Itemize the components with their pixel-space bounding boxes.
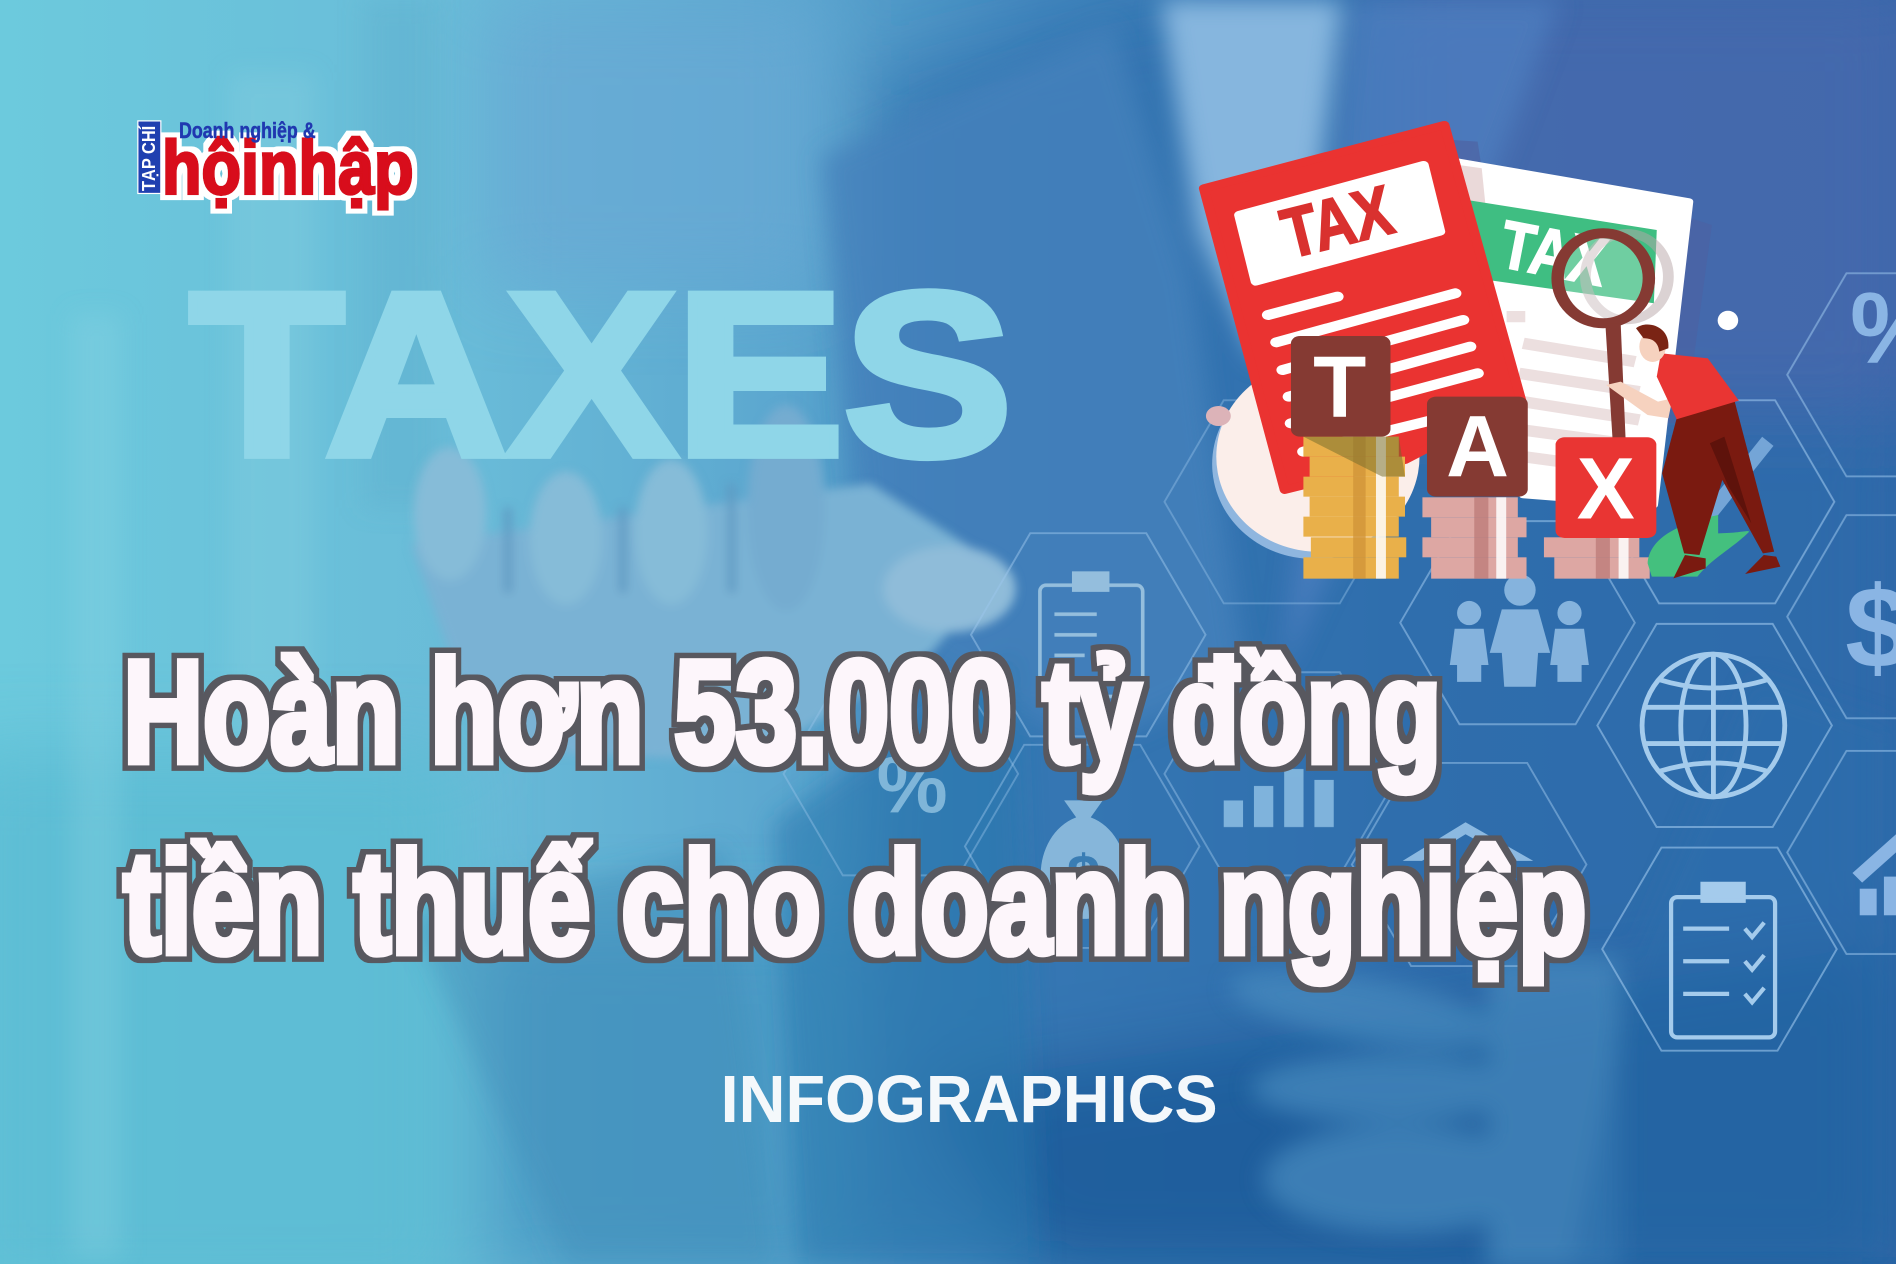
white tax document [1453, 140, 1712, 505]
gold coin stack [1303, 437, 1406, 579]
letter X on block: X [1577, 441, 1635, 538]
INFOGRAPHICS label: INFOGRAPHICS [721, 1063, 1218, 1137]
second hand, lower right [1224, 677, 1896, 1264]
icon: clipboard left [1040, 573, 1143, 696]
pink coin stack under X [1544, 537, 1650, 579]
hand with pointing finger [411, 405, 1016, 762]
icon: group of people [1450, 574, 1589, 687]
letter A on block: A [1446, 398, 1509, 495]
man leaning on magnifier [1606, 325, 1780, 578]
icon: dollar bag: $ [1067, 842, 1100, 910]
headline [123, 631, 1586, 984]
icon: clipboard right [1671, 884, 1775, 1037]
red tax document [1204, 125, 1521, 490]
illustration: tax documents, coins and man with magnifier [1204, 125, 1780, 579]
icon: bar chart [1224, 769, 1334, 827]
logo: magazine tag: TẠP CHÍ [138, 125, 159, 191]
TAX label on red document: TAX [1274, 171, 1401, 273]
headline line 1: Hoàn hơn 53.000 tỷ đồng [123, 631, 1441, 793]
green plant [1648, 515, 1749, 577]
icon: house right [1852, 834, 1896, 915]
pink coin stack under A [1422, 497, 1527, 579]
block A [1427, 397, 1528, 497]
TAX label on white document: TAX [1494, 207, 1613, 301]
background word TAXES: TAXES [190, 246, 1012, 505]
block X [1556, 437, 1656, 538]
logo: Tạp chí Doanh nghiệp & hội nhập [138, 118, 414, 209]
icon: percent left: % [877, 741, 948, 830]
white dot [1718, 311, 1738, 330]
hexagon network pattern with icons [784, 271, 1896, 1051]
icon: checkmark [1683, 441, 1768, 520]
icon: globe [1642, 654, 1785, 797]
logo wordmark: hộinhập [162, 125, 414, 209]
logo: subtitle: Doanh nghiệp & [179, 118, 316, 143]
letter T on block: T [1313, 339, 1366, 436]
white round blob [1206, 362, 1420, 559]
block T [1291, 336, 1390, 437]
icon: house [1403, 822, 1533, 861]
magnifying glass [1558, 233, 1668, 477]
icon: dollar bag [1041, 800, 1127, 919]
